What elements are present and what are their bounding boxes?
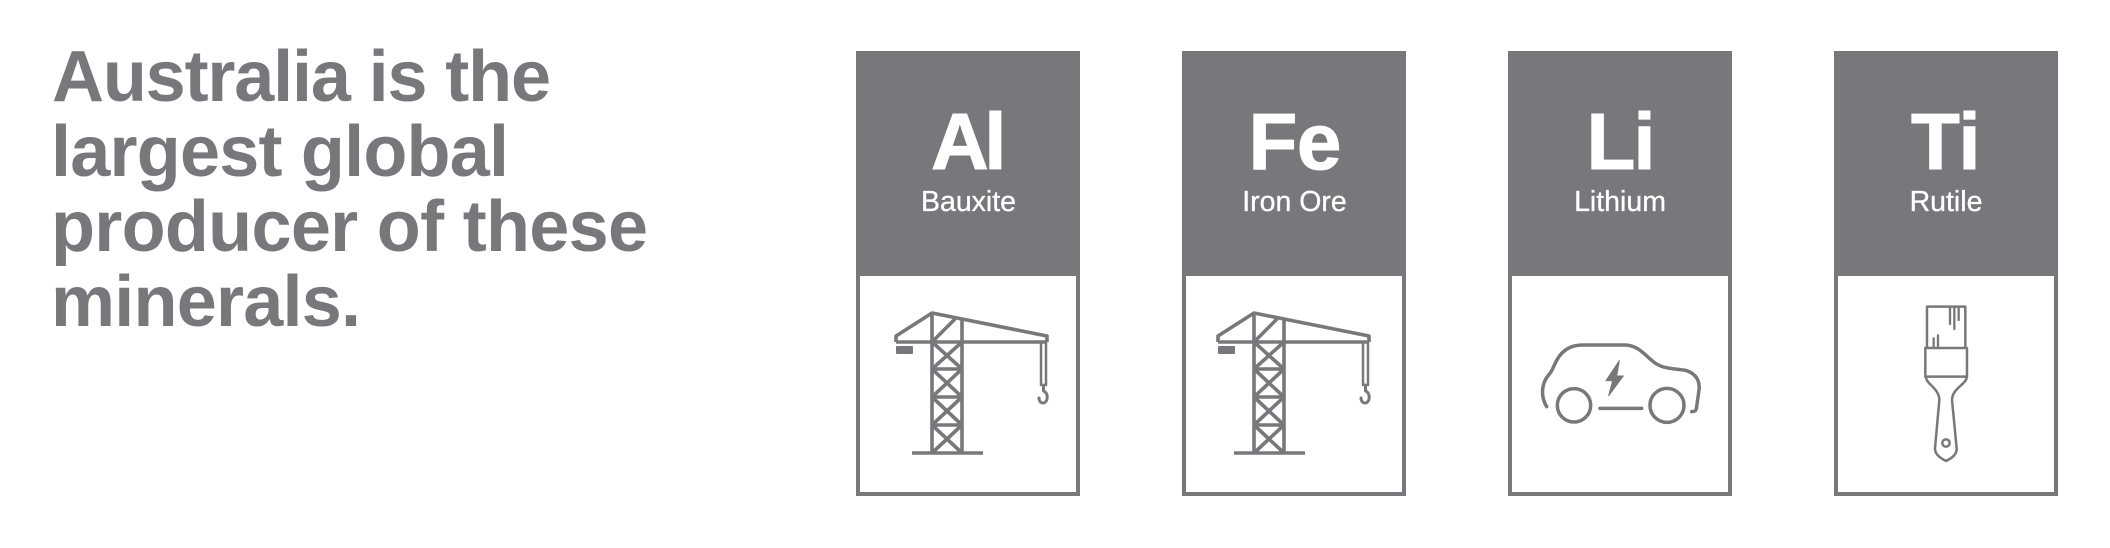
card frame: Fe <box>1184 53 1404 494</box>
heading: minerals. <box>51 262 361 342</box>
card header: Ti <box>1834 51 2058 276</box>
name: Iron Ore: Iron Ore <box>1242 186 1347 218</box>
icon: electric car <box>1543 345 1699 422</box>
symbol: Al: Al <box>931 97 1002 186</box>
icon: crane <box>1218 313 1369 453</box>
name: Lithium: Lithium <box>1574 186 1666 218</box>
heading <box>51 37 648 342</box>
panel: titanium <box>1834 51 2058 494</box>
icon: paint brush <box>1925 307 1967 461</box>
card header: Al <box>856 51 1080 276</box>
panel: lithium <box>1508 51 1732 494</box>
panel: aluminium <box>856 51 1080 494</box>
card header: Li <box>1508 51 1732 276</box>
heading: producer of these <box>51 187 648 267</box>
card frame: Ti <box>1836 53 2056 494</box>
card header: Fe <box>1182 51 1406 276</box>
symbol: Ti: Ti <box>1911 97 1981 186</box>
card frame: Al <box>858 53 1078 494</box>
symbol: Fe: Fe <box>1248 97 1341 186</box>
icon: crane <box>896 313 1047 453</box>
heading: largest global <box>51 112 509 192</box>
panel: iron <box>1182 51 1406 494</box>
name: Bauxite: Bauxite <box>921 186 1016 218</box>
heading: Australia is the <box>52 37 551 117</box>
name: Rutile: Rutile <box>1910 186 1982 218</box>
card frame: Li <box>1510 53 1730 494</box>
symbol: Li: Li <box>1586 97 1654 186</box>
